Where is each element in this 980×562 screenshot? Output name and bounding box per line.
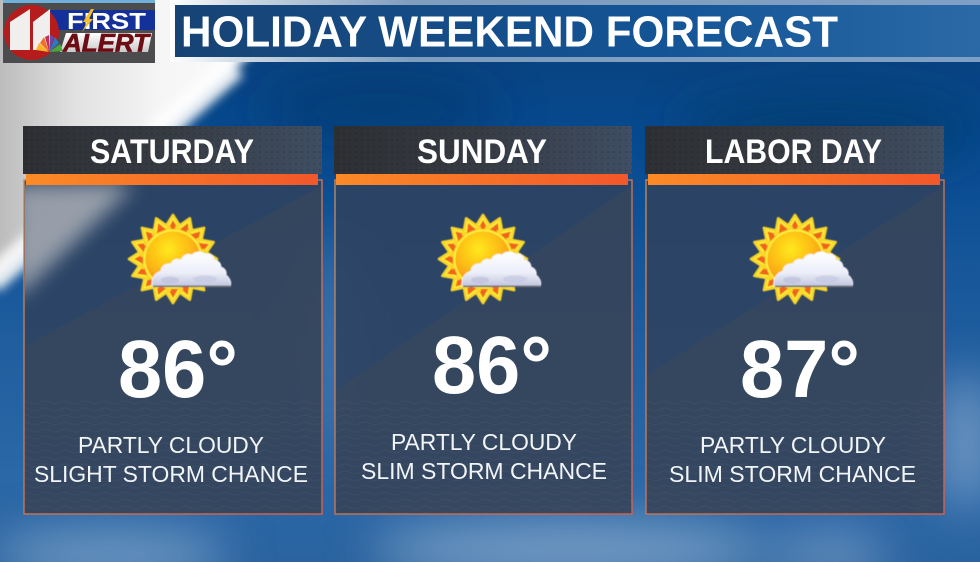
- title text: HOLIDAY WEEKEND FORECAST: [181, 8, 838, 56]
- logo numeral eleven: [10, 9, 50, 50]
- accent bar: [648, 174, 940, 185]
- header bar: [23, 126, 322, 174]
- logo ALERT: ALERT: [62, 30, 152, 58]
- icon: partly cloudy: [129, 215, 231, 303]
- heading: LABOR DAY: [705, 133, 882, 171]
- icon: partly cloudy: [751, 215, 853, 303]
- conditions text: SLIGHT STORM CHANCE: [34, 461, 308, 487]
- accent bar: [26, 174, 318, 185]
- accent bar: [336, 174, 628, 185]
- temperature: 87°: [740, 324, 860, 415]
- logo white banner: [60, 33, 152, 52]
- heading: SUNDAY: [417, 133, 547, 171]
- logo bolt: [82, 9, 94, 32]
- logo blue banner: [50, 10, 155, 30]
- title bar: [170, 0, 980, 62]
- heading: SATURDAY: [90, 133, 254, 171]
- conditions text: PARTLY CLOUDY: [391, 429, 577, 455]
- conditions text: [361, 429, 607, 484]
- background: white diagonal sweep: [0, 0, 330, 312]
- conditions text: SLIM STORM CHANCE: [669, 461, 916, 487]
- panel body: [15, 180, 322, 514]
- conditions text: PARTLY CLOUDY: [700, 432, 886, 458]
- icon: partly cloudy: [439, 215, 541, 303]
- conditions text: [669, 432, 916, 487]
- logo peacock: [36, 35, 63, 52]
- conditions text: [34, 432, 308, 487]
- conditions text: SLIM STORM CHANCE: [361, 458, 607, 484]
- logo FIRST: FIRST: [67, 8, 146, 34]
- temperature: 86°: [432, 320, 552, 411]
- panel: Saturday: [15, 126, 322, 514]
- header bar: [645, 126, 944, 174]
- logo red circle: [4, 5, 59, 60]
- panel: Sunday: [334, 126, 632, 514]
- panel body: [646, 180, 944, 514]
- header bar: [334, 126, 632, 174]
- conditions text: PARTLY CLOUDY: [78, 432, 264, 458]
- temperature: 86°: [118, 324, 238, 415]
- logo: First Alert 11 NBC: [3, 0, 155, 63]
- panel body: [335, 180, 632, 514]
- panel: Labor Day: [645, 126, 944, 514]
